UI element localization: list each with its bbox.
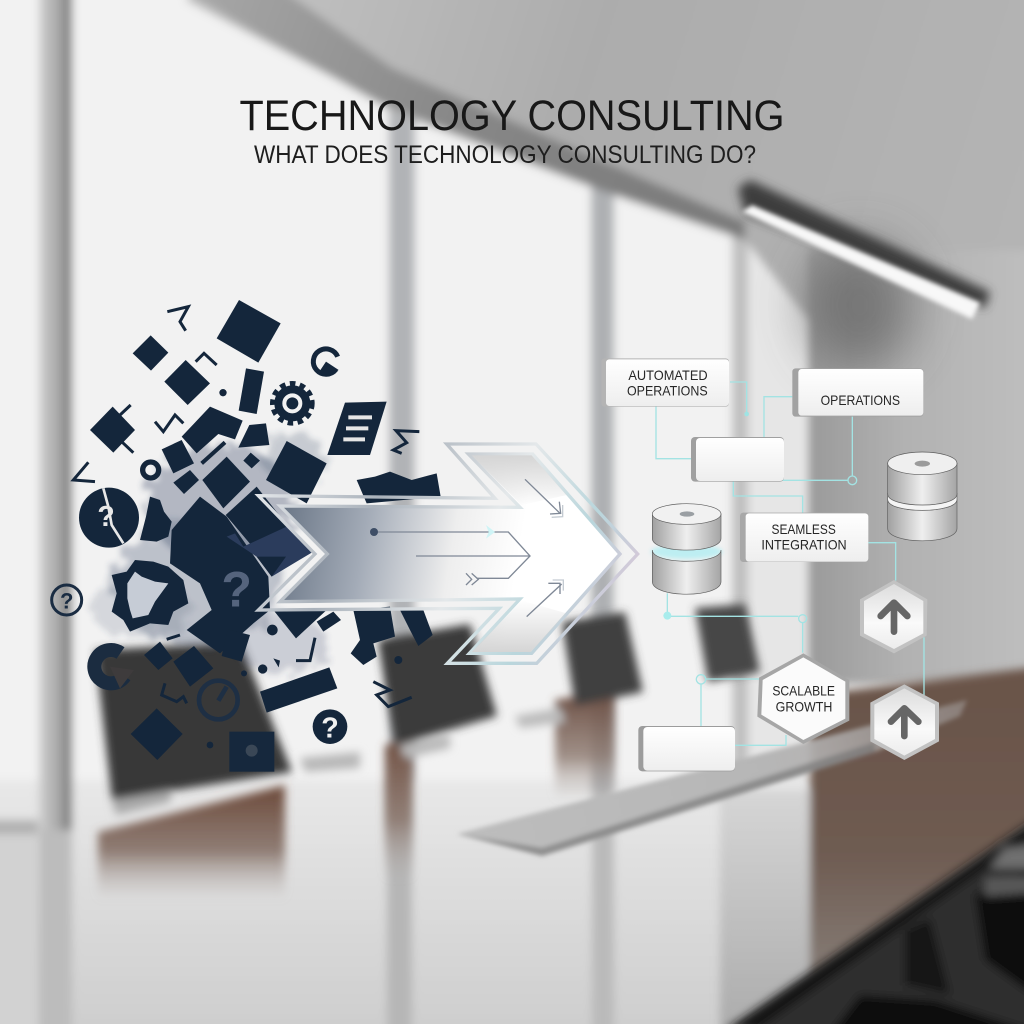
circuit lines inside arrow <box>370 479 563 617</box>
arrow head upper shading <box>472 455 567 505</box>
arrow head outline <box>258 444 638 663</box>
cyan arrow tip <box>486 525 495 539</box>
solution diagram <box>601 358 957 771</box>
ceiling light fixture shadow band <box>738 180 990 308</box>
icon: outlined question mark <box>52 585 82 615</box>
box: operations <box>792 368 923 417</box>
icon: faded question mark: ? <box>221 562 252 618</box>
connector lines <box>656 382 924 745</box>
icon: solid question badge <box>313 709 347 744</box>
box: seamless integration <box>740 513 868 562</box>
icon: cracked question disc <box>79 488 139 548</box>
icon: ring <box>143 462 159 478</box>
outline strokes <box>73 307 419 707</box>
icon: gear <box>273 384 311 422</box>
icon: database cylinder left <box>651 504 723 594</box>
icon: cracked question disc: ? <box>97 501 115 533</box>
hexagon: up arrow <box>860 580 927 653</box>
icon: database cylinder right <box>888 452 957 541</box>
chaos cluster of dark shapes <box>52 300 441 772</box>
icon: square with dot <box>229 732 274 772</box>
central transformation arrow <box>258 444 638 663</box>
box: automated operations <box>601 358 729 407</box>
hexagon: scalable growth: GROWTH <box>776 699 832 715</box>
hexagon: scalable growth: SCALABLE <box>772 683 835 699</box>
dark triangle <box>257 557 286 577</box>
icon: document <box>327 402 387 455</box>
ink splash <box>90 432 327 673</box>
arrow body <box>280 454 620 653</box>
icon: clock <box>199 681 238 719</box>
box: automated operations: AUTOMATED <box>628 367 708 383</box>
box: seamless integration: SEAMLESS <box>771 521 836 537</box>
box: automated operations: OPERATIONS <box>627 383 708 399</box>
title: TECHNOLOGY CONSULTING <box>240 92 784 140</box>
hexagon: up arrow lower <box>870 684 939 760</box>
icon: large broken gear <box>112 560 188 632</box>
arrow head lower shading <box>472 601 567 652</box>
wall shadow under fixture <box>805 240 915 370</box>
icon: outlined question mark: ? <box>60 588 73 613</box>
box: empty lower node <box>638 726 735 771</box>
icon: pie ring <box>313 349 339 376</box>
box: empty node <box>691 437 784 482</box>
icon: solid question badge: ? <box>321 712 339 744</box>
box: seamless integration: INTEGRATION <box>761 536 847 552</box>
box: operations: OPERATIONS <box>821 392 900 408</box>
hexagon: scalable growth <box>757 653 849 744</box>
dark shape fragments <box>90 300 441 760</box>
subtitle: WHAT DOES TECHNOLOGY CONSULTING DO? <box>254 141 756 169</box>
lighter navy wedge <box>227 527 313 577</box>
icon: donut pie <box>88 643 134 690</box>
